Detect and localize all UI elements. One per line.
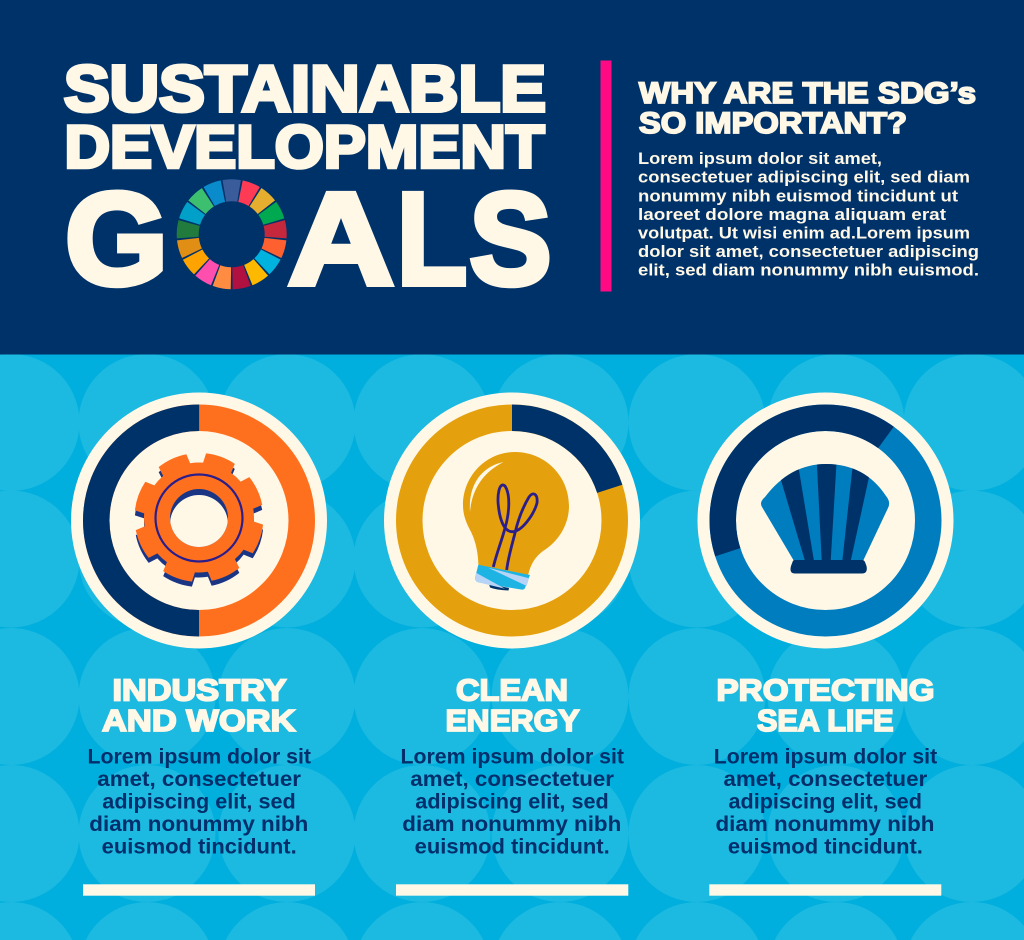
text: clean energy description: diam nonummy nibh <box>402 812 621 836</box>
heading: protecting sea life: SEA LIFE <box>757 703 894 738</box>
intro paragraph: laoreet dolore magna aliquam erat <box>638 205 946 224</box>
title: sustainable development goals: G <box>65 165 168 312</box>
heading: protecting sea life <box>716 672 934 738</box>
pink divider bar <box>600 60 612 292</box>
text: clean energy description: amet, consectetuer <box>410 767 615 791</box>
heading: why are the SDGs so important: SO IMPORTANT? <box>639 107 907 140</box>
text: sea life description: diam nonummy nibh <box>716 812 934 836</box>
header panel <box>0 0 1024 354</box>
text: industry description: amet, consectetuer <box>97 767 302 791</box>
panel: clean energy <box>384 392 640 896</box>
heading: clean energy <box>446 672 580 738</box>
underline bar <box>396 884 628 896</box>
heading: clean energy: CLEAN <box>456 672 568 708</box>
icon: SDG colour wheel <box>170 172 294 296</box>
intro paragraph: volutpat. Ut wisi enim ad.Lorem ipsum <box>638 223 970 242</box>
icon: light bulb <box>463 452 569 590</box>
intro paragraph: consectetuer adipiscing elit, sed diam <box>638 168 970 187</box>
underline bar <box>83 884 315 896</box>
text: clean energy description: euismod tincidunt. <box>415 834 610 858</box>
text: industry description: diam nonummy nibh <box>89 812 308 836</box>
intro paragraph: elit, sed diam nonummy nibh euismod. <box>638 260 979 280</box>
text: clean energy description <box>400 744 624 858</box>
icon: sea shell <box>761 460 889 574</box>
panel: industry and work <box>71 392 327 896</box>
text: sea life description: euismod tincidunt. <box>728 834 923 858</box>
text: industry description: euismod tincidunt. <box>102 834 297 858</box>
intro paragraph: nonummy nibh euismod tincidunt ut <box>638 186 958 205</box>
heading: industry and work: INDUSTRY <box>112 672 287 708</box>
title: sustainable development goals <box>64 52 552 312</box>
heading: industry and work: AND WORK <box>102 703 296 738</box>
donut chart: sea life 40 percent <box>696 391 955 650</box>
heading: industry and work <box>102 672 296 738</box>
intro paragraph <box>638 149 979 280</box>
donut chart: clean energy 20 percent <box>384 392 640 648</box>
heading: why are the SDGs so important: WHY ARE THE SDG’s <box>639 77 976 110</box>
text: industry description: Lorem ipsum dolor sit <box>88 744 311 768</box>
text: clean energy description: Lorem ipsum dolor sit <box>400 744 624 768</box>
title: sustainable development goals: SUSTAINABLE <box>64 52 546 125</box>
icon: gear <box>133 451 265 589</box>
text: sea life description: adipiscing elit, sed <box>728 789 922 813</box>
text: sea life description: Lorem ipsum dolor sit <box>714 744 937 768</box>
heading: clean energy: ENERGY <box>446 703 580 738</box>
title: sustainable development goals: DEVELOPMENT <box>64 114 544 180</box>
text: industry description <box>88 744 311 858</box>
heading: protecting sea life: PROTECTING <box>716 672 934 708</box>
title: sustainable development goals: L <box>397 165 467 312</box>
donut chart: industry 50 percent <box>71 392 327 648</box>
text: industry description: adipiscing elit, sed <box>102 789 296 813</box>
title: sustainable development goals: A <box>288 165 394 312</box>
text: clean energy description: adipiscing elit, sed <box>415 789 609 813</box>
text: sea life description <box>714 744 937 858</box>
title: sustainable development goals: S <box>470 165 552 312</box>
intro paragraph: dolor sit amet, consectetuer adipiscing <box>638 242 979 261</box>
underline bar <box>709 884 941 896</box>
panel: protecting sea life <box>696 391 955 896</box>
heading: why are the SDGs so important <box>639 77 976 140</box>
text: sea life description: amet, consectetuer <box>724 767 928 791</box>
intro paragraph: Lorem ipsum dolor sit amet, <box>638 149 882 168</box>
